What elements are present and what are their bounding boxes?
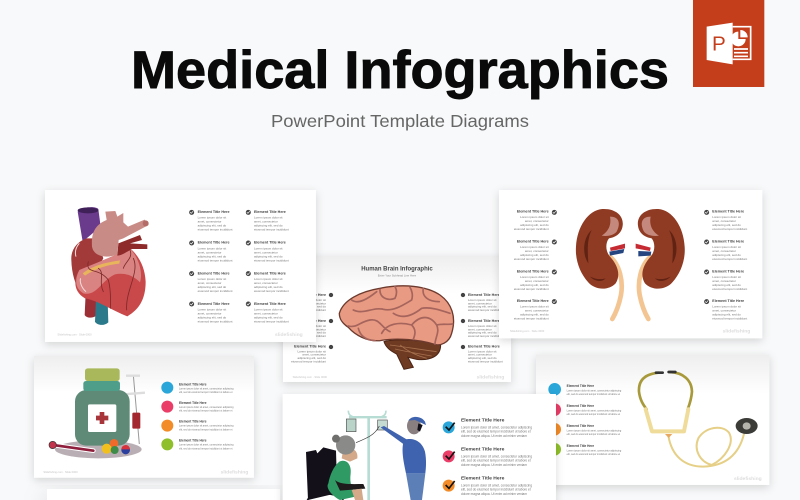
text block: kidney left 3 (514, 269, 549, 291)
text block: heart r4c1: Lorem ipsum dolor sit (198, 308, 226, 312)
text block: heart r3c1 (198, 271, 233, 293)
text block: kidney left 3: adipiscing elit, sed do (520, 283, 549, 287)
illustration: heart (71, 207, 149, 325)
text block: IV 2: Lorem ipsum dolor sit amet, consectetur adipiscing (461, 454, 532, 458)
text block: heart r3c2: eiusmod tempor incididunt (254, 289, 289, 293)
text block: kidney left 1: adipiscing elit, sed do (520, 223, 549, 227)
text block: brain left 2: adipiscing elit, sed do (297, 331, 326, 335)
text block: brain left 2: Lorem ipsum dolor sit (297, 324, 326, 328)
text block: medicine 4 (179, 439, 234, 450)
text block: kidney left 2 (514, 239, 549, 261)
text block: heart r1c2: Element Title Here (254, 210, 286, 214)
text block: stethoscope 3 (567, 424, 622, 436)
text block: kidney left 2: adipiscing elit, sed do (520, 253, 549, 257)
text block: heart r4c1: amet, consectetur (198, 312, 221, 316)
text block: brain right 1: amet, consectetur (468, 301, 492, 305)
text block: heart r3c2: Lorem ipsum dolor sit (254, 277, 283, 281)
text block: heart r1c2: adipiscing elit, sed do (254, 224, 283, 228)
text block: kidney right 1: Element Title Here (712, 209, 744, 213)
text block: stethoscope 1: elit, sed do eiusmod tempor incididunt ut labore et (567, 393, 620, 396)
text block: kidney right 2: eiusmod tempor incididunt (712, 257, 747, 261)
text block: medicine 1: Lorem ipsum dolor sit amet, consectetur adipiscing (179, 387, 234, 390)
text block: heart r3c1: Element Title Here (198, 271, 229, 275)
text block: kidney left 4 (514, 299, 549, 321)
text block: kidney left 4: amet, consectetur (525, 309, 549, 313)
icon: green circle (548, 443, 561, 456)
text block: kidney left 4: Element Title Here (517, 299, 549, 303)
text block: kidney right 1: adipiscing elit, sed do (712, 223, 741, 227)
text block: brain right 3 (468, 344, 503, 363)
text block: IV 1: elit, sed do eiusmod tempor incididunt ut labore et (461, 430, 531, 434)
brain watermark: slidefishing (477, 375, 504, 381)
text block: heart r4c1: Element Title Here (198, 302, 229, 306)
stethoscope watermark: slidefishing (734, 476, 762, 482)
text block: kidney right 4: Lorem ipsum dolor sit (712, 305, 741, 309)
illustration: kidneys (576, 209, 685, 319)
text block: kidney left 4: eiusmod tempor incididunt (514, 317, 549, 321)
icon: blue circle (548, 383, 561, 396)
text block: stethoscope 3: elit, sed do eiusmod tempor incididunt ut labore et (567, 433, 620, 436)
text block: kidney left 3: Element Title Here (517, 269, 549, 273)
text block: IV 3: Lorem ipsum dolor sit amet, consectetur adipiscing (461, 483, 532, 487)
text block: brain right 2: amet, consectetur (468, 327, 492, 331)
icons: heart checks (189, 210, 251, 306)
text block: stethoscope 1: Lorem ipsum dolor sit amet, consectetur adipiscing (567, 389, 622, 392)
medicine footer: Slidefishing.com · Slide 0000 (43, 470, 78, 474)
icon: pink circle (161, 401, 173, 413)
text block: kidney right 2 (712, 239, 747, 261)
text block: heart r1c2: Lorem ipsum dolor sit (254, 216, 283, 220)
text block: heart r2c2 (254, 241, 289, 262)
text block: brain right 2: eiusmod tempor incididunt (468, 334, 503, 338)
brain footer: Slidefishing.com · Slide 0000 (293, 375, 327, 379)
text block: brain left 1: adipiscing elit, sed do (297, 305, 326, 309)
icon: pink circle (548, 403, 561, 416)
text block: stethoscope 1 (567, 384, 622, 396)
text block: kidney left 2: eiusmod tempor incididunt (514, 257, 549, 261)
text block: medicine 4: elit, sed do eiusmod tempor incididunt ut labore et (179, 447, 233, 450)
text block: medicine 1 (179, 382, 234, 394)
text block: heart r3c2 (254, 271, 289, 293)
text block: kidney right 1: eiusmod tempor incididunt (712, 227, 747, 231)
text block: brain right 2: adipiscing elit, sed do (468, 331, 497, 335)
text block: kidney right 3: eiusmod tempor incididunt (712, 287, 747, 291)
illustration: nurse and patient in wheelchair (306, 411, 426, 500)
text block: kidney right 3: adipiscing elit, sed do (712, 283, 741, 287)
panel: partly visible bottom slide (47, 489, 280, 500)
panel: heart slide (45, 190, 316, 342)
heart watermark: slidefishing (275, 332, 303, 338)
text block: heart r4c1: eiusmod tempor incididunt (198, 320, 233, 324)
text block: medicine 1: Element Title Here (179, 382, 207, 386)
text block: heart r4c1 (198, 302, 233, 324)
text block: heart r2c1: adipiscing elit, sed do (198, 254, 227, 258)
text block: heart r4c2: Element Title Here (254, 302, 286, 306)
text block: kidney left 3: amet, consectetur (525, 279, 549, 283)
text block: brain right 2: Element Title Here (468, 319, 500, 323)
text block: brain left 1: eiusmod tempor incididunt (291, 308, 326, 312)
text block: kidney right 4 (712, 299, 747, 321)
text block: medicine 3: Element Title Here (179, 420, 207, 424)
text block: medicine 3: elit, sed do eiusmod tempor incididunt ut labore et (179, 428, 233, 431)
panel: medicine slide (34, 356, 254, 478)
text block: heart r2c1 (198, 241, 233, 262)
icons: kidney checks (552, 210, 709, 304)
text block: brain left 3: Element Title Here (294, 344, 326, 348)
text block: heart r3c2: amet, consectetur (254, 281, 278, 285)
text block: heart r2c1: Element Title Here (198, 241, 229, 245)
icon: green circle (161, 438, 173, 450)
text block: heart r1c1: Lorem ipsum dolor sit (198, 216, 226, 220)
text block: kidney right 4: adipiscing elit, sed do (712, 313, 741, 317)
text block: heart r3c1: Lorem ipsum dolor sit (198, 277, 226, 281)
text block: kidney left 1 (514, 209, 549, 231)
text block: stethoscope 4: Element Title Here (567, 444, 594, 448)
text block: kidney left 1: Element Title Here (517, 209, 549, 213)
subtitle: PowerPoint Template Diagrams (271, 111, 529, 131)
text block: IV 2: Element Title Here (461, 447, 505, 453)
text block: medicine 2: Element Title Here (179, 401, 207, 405)
text block: medicine 1: elit, sed do eiusmod tempor incididunt ut labore et (179, 391, 233, 394)
medicine watermark: slidefishing (221, 469, 248, 475)
kidney footer: Slidefishing.com · Slide 0000 (510, 329, 545, 333)
title: Medical Infographics (131, 41, 669, 100)
icon: orange circle (548, 423, 561, 436)
text block: stethoscope 3: Element Title Here (567, 424, 594, 428)
text block: IV 1: Lorem ipsum dolor sit amet, consectetur adipiscing (461, 425, 532, 429)
text block: brain left 1: Element Title Here (294, 293, 326, 297)
text block: brain right 3: adipiscing elit, sed do (468, 356, 497, 360)
text block: heart r2c1: eiusmod tempor incididunt (198, 258, 233, 262)
text block: medicine 2 (179, 401, 234, 413)
illustration: brain (339, 286, 454, 369)
text block: IV 1: Element Title Here (461, 418, 505, 424)
text block: brain right 2 (468, 319, 503, 338)
text block: heart r1c1: Element Title Here (198, 210, 229, 214)
text block: medicine 3 (179, 420, 234, 431)
text block: kidney right 1: Lorem ipsum dolor sit (712, 215, 741, 219)
text block: kidney left 4: adipiscing elit, sed do (520, 313, 549, 317)
text block: kidney left 2: Lorem ipsum dolor sit (520, 245, 549, 249)
text block: IV 1: dolore magna aliqua. Ut enim ad minim veniam (461, 434, 527, 438)
text block: kidney right 2: adipiscing elit, sed do (712, 253, 741, 257)
text block: heart r1c2: eiusmod tempor incididunt (254, 228, 289, 232)
text block: stethoscope 4: Lorem ipsum dolor sit amet, consectetur adipiscing (567, 449, 622, 452)
text block: heart r2c1: amet, consectetur (198, 250, 221, 254)
text block: heart r2c2: Lorem ipsum dolor sit (254, 246, 283, 250)
text block: IV 1 (461, 418, 532, 438)
text block: brain left 2: amet, consectetur (302, 327, 326, 331)
text block: kidney left 3: Lorem ipsum dolor sit (520, 275, 549, 279)
panel: IV patient slide (283, 394, 556, 500)
text block: heart r3c1: adipiscing elit, sed do (198, 285, 227, 289)
text block: stethoscope 2: elit, sed do eiusmod tempor incididunt ut labore et (567, 413, 620, 416)
text block: heart r1c1 (198, 210, 233, 232)
text block: brain right 3: Element Title Here (468, 344, 500, 348)
icon: PowerPoint logo (693, 0, 764, 87)
brain subheading: Enter Your Subhead Line Here (378, 274, 417, 278)
text block: brain right 2: Lorem ipsum dolor sit (468, 324, 497, 328)
text block: heart r3c1: amet, consectetur (198, 281, 221, 285)
text block: brain left 3 (291, 344, 326, 363)
text block: kidney right 4: eiusmod tempor incididunt (712, 317, 747, 321)
text block: heart r3c1: eiusmod tempor incididunt (198, 289, 233, 293)
text block: IV 3 (461, 476, 532, 496)
illustration: stethoscope (639, 372, 758, 467)
panel: brain slide (283, 256, 511, 382)
text block: heart r4c2: adipiscing elit, sed do (254, 316, 283, 320)
kidney watermark: slidefishing (723, 329, 750, 335)
text block: brain left 1: Lorem ipsum dolor sit (297, 298, 326, 302)
text block: kidney left 1: Lorem ipsum dolor sit (520, 215, 549, 219)
text block: kidney left 2: amet, consectetur (525, 249, 549, 253)
text block: heart r4c2: amet, consectetur (254, 312, 278, 316)
text block: kidney right 4: amet, consectetur (712, 309, 736, 313)
text block: brain right 3: eiusmod tempor incididunt (468, 359, 503, 363)
text block: brain left 2: eiusmod tempor incididunt (291, 334, 326, 338)
text block: brain left 1 (291, 293, 326, 312)
text block: heart r1c1: amet, consectetur (198, 220, 221, 224)
text block: kidney left 3: eiusmod tempor incididunt (514, 287, 549, 291)
text block: IV 2: elit, sed do eiusmod tempor incididunt ut labore et (461, 459, 531, 463)
brain heading: Human Brain Infographic (361, 267, 433, 273)
text block: brain right 3: amet, consectetur (468, 353, 492, 357)
panel: stethoscope slide (536, 354, 769, 485)
text block: brain left 3: adipiscing elit, sed do (297, 356, 326, 360)
text block: brain right 1 (468, 293, 503, 312)
text block: kidney right 1: amet, consectetur (712, 219, 736, 223)
text block: kidney right 1 (712, 209, 747, 231)
icon: blue circle (161, 382, 173, 394)
text block: heart r1c1: eiusmod tempor incididunt (198, 228, 233, 232)
text block: brain right 1: adipiscing elit, sed do (468, 305, 497, 309)
text block: kidney right 4: Element Title Here (712, 299, 744, 303)
text block: stethoscope 4: elit, sed do eiusmod tempor incididunt ut labore et (567, 453, 620, 456)
text block: stethoscope 1: Element Title Here (567, 384, 594, 388)
text block: kidney left 1: amet, consectetur (525, 219, 549, 223)
text block: heart r1c1: adipiscing elit, sed do (198, 224, 227, 228)
text block: heart r4c2: Lorem ipsum dolor sit (254, 308, 283, 312)
icon: pink check (443, 450, 455, 462)
icon: PowerPoint logo: P (712, 33, 726, 56)
text block: medicine 3: Lorem ipsum dolor sit amet, consectetur adipiscing (179, 425, 234, 428)
text block: heart r2c2: eiusmod tempor incididunt (254, 258, 289, 262)
text block: medicine 2: elit, sed do eiusmod tempor incididunt ut labore et (179, 410, 233, 413)
icons: brain checks (329, 293, 465, 349)
text block: kidney right 3: Lorem ipsum dolor sit (712, 275, 741, 279)
text block: heart r2c2: amet, consectetur (254, 250, 278, 254)
text block: heart r3c2: adipiscing elit, sed do (254, 285, 283, 289)
text block: kidney left 1: eiusmod tempor incididunt (514, 227, 549, 231)
text block: kidney right 2: Lorem ipsum dolor sit (712, 245, 741, 249)
text block: kidney left 4: Lorem ipsum dolor sit (520, 305, 549, 309)
text block: IV 3: Element Title Here (461, 476, 505, 482)
text block: medicine 4: Element Title Here (179, 439, 207, 443)
text block: brain left 3: Lorem ipsum dolor sit (297, 349, 326, 353)
text block: brain left 2: Element Title Here (294, 319, 326, 323)
text block: medicine 4: Lorem ipsum dolor sit amet, consectetur adipiscing (179, 444, 234, 447)
text block: kidney right 3: amet, consectetur (712, 279, 736, 283)
text block: brain right 1: Element Title Here (468, 293, 500, 297)
text block: stethoscope 4 (567, 444, 622, 456)
text block: medicine 2: Lorem ipsum dolor sit amet, consectetur adipiscing (179, 406, 234, 409)
text block: IV 2: dolore magna aliqua. Ut enim ad minim veniam (461, 463, 527, 467)
text block: stethoscope 2: Element Title Here (567, 404, 594, 408)
text block: heart r4c2 (254, 302, 289, 324)
text block: heart r4c1: adipiscing elit, sed do (198, 316, 227, 320)
text block: heart r2c2: adipiscing elit, sed do (254, 254, 283, 258)
text block: IV 3: dolore magna aliqua. Ut enim ad minim veniam (461, 492, 527, 496)
text block: brain right 3: Lorem ipsum dolor sit (468, 349, 497, 353)
text block: heart r1c2: amet, consectetur (254, 220, 278, 224)
icon: orange circle (161, 420, 173, 432)
text block: brain right 1: Lorem ipsum dolor sit (468, 298, 497, 302)
text block: stethoscope 3: Lorem ipsum dolor sit amet, consectetur adipiscing (567, 429, 622, 432)
text block: brain left 1: amet, consectetur (302, 301, 326, 305)
text block: stethoscope 2 (567, 404, 622, 416)
text block: IV 3: elit, sed do eiusmod tempor incididunt ut labore et (461, 488, 531, 492)
text block: kidney left 2: Element Title Here (517, 239, 549, 243)
text block: brain left 3: amet, consectetur (302, 353, 326, 357)
text block: brain right 1: eiusmod tempor incididunt (468, 308, 503, 312)
text block: kidney right 2: Element Title Here (712, 239, 744, 243)
icon: orange check (443, 480, 455, 492)
text block: IV 2 (461, 447, 532, 467)
text block: kidney right 2: amet, consectetur (712, 249, 736, 253)
text block: stethoscope 2: Lorem ipsum dolor sit amet, consectetur adipiscing (567, 409, 622, 412)
panel: kidney slide (499, 190, 762, 338)
text block: kidney right 3: Element Title Here (712, 269, 744, 273)
text block: heart r4c2: eiusmod tempor incididunt (254, 320, 289, 324)
heart footer: Slidefishing.com · Slide 0000 (57, 333, 92, 337)
text block: heart r3c2: Element Title Here (254, 271, 286, 275)
illustration: medicine bottle (49, 368, 145, 458)
text block: heart r2c2: Element Title Here (254, 241, 286, 245)
text block: heart r2c1: Lorem ipsum dolor sit (198, 246, 226, 250)
icon: blue check (443, 421, 455, 433)
text block: heart r1c2 (254, 210, 289, 232)
text block: kidney right 3 (712, 269, 747, 291)
text block: brain left 2 (291, 319, 326, 338)
text block: brain left 3: eiusmod tempor incididunt (291, 359, 326, 363)
